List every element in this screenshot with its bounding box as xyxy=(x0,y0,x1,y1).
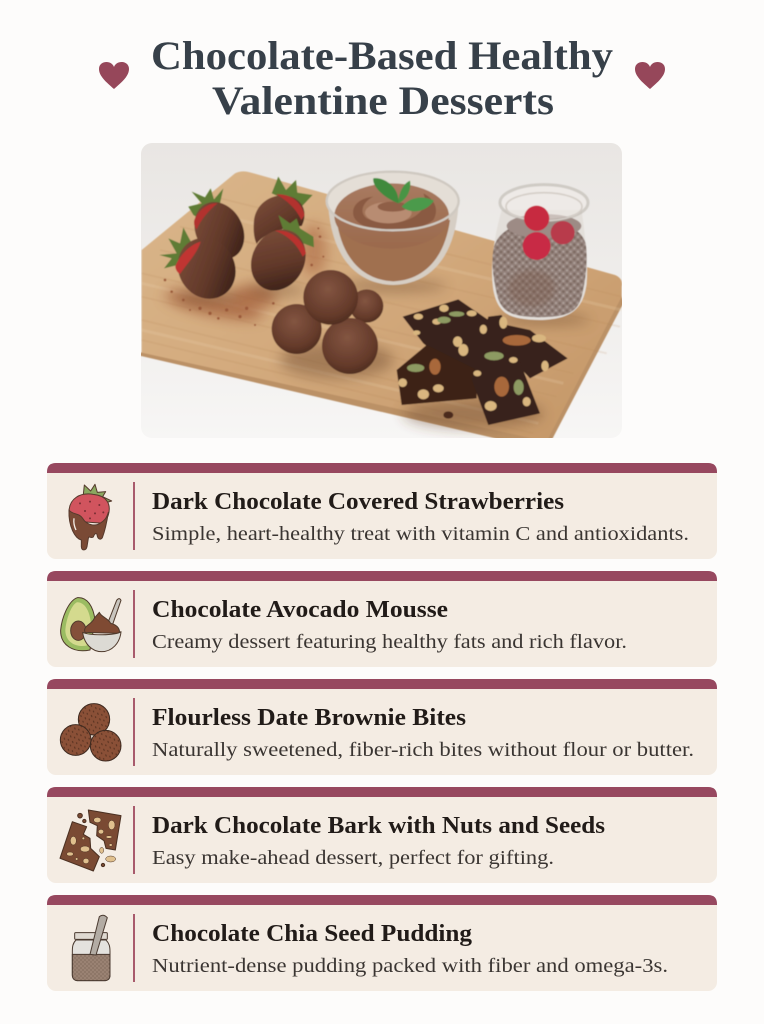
brownie bites xyxy=(272,270,383,374)
divider xyxy=(133,482,135,550)
divider xyxy=(133,698,135,766)
strawberry back right xyxy=(254,177,313,244)
icon: chia jar with spoon xyxy=(72,915,110,981)
strawberry front right xyxy=(250,215,314,291)
title: Chocolate-Based Healthy xyxy=(151,33,613,78)
description: Naturally sweetened, fiber-rich bites without flour or butter. xyxy=(152,739,694,761)
title: Valentine Desserts xyxy=(212,78,554,123)
card 4: chocolate bark xyxy=(47,787,717,883)
mousse bowl xyxy=(327,171,459,285)
card background xyxy=(47,679,717,775)
soft shadows xyxy=(178,280,590,428)
top bar xyxy=(47,463,717,473)
icon: right heart xyxy=(635,62,665,89)
chia pudding jar xyxy=(492,185,588,320)
icon: bark pieces xyxy=(60,810,121,871)
mint xyxy=(373,178,398,203)
card 3: brownie bites xyxy=(47,679,717,775)
heading: Dark Chocolate Bark with Nuts and Seeds xyxy=(152,813,605,839)
top bar xyxy=(47,679,717,689)
strawberry front left xyxy=(160,228,236,300)
card 5: chia pudding xyxy=(47,895,717,991)
description: Creamy dessert featuring healthy fats and rich flavor. xyxy=(152,631,627,653)
card background xyxy=(47,787,717,883)
card background xyxy=(47,571,717,667)
cocoa dust xyxy=(162,223,327,326)
top bar xyxy=(47,895,717,905)
card background xyxy=(47,895,717,991)
board xyxy=(138,171,623,443)
top bar xyxy=(47,787,717,797)
heading: Chocolate Chia Seed Pudding xyxy=(152,921,472,947)
card 2: avocado mousse xyxy=(47,571,717,667)
description: Simple, heart-healthy treat with vitamin C and antioxidants. xyxy=(152,523,689,545)
icon: avocado and mousse bowl xyxy=(61,598,121,652)
icon: left heart xyxy=(99,62,129,89)
description: Easy make-ahead dessert, perfect for gifting. xyxy=(152,847,554,869)
chocolate bark pieces xyxy=(397,299,568,425)
title xyxy=(151,33,613,123)
icon: three brownie bites xyxy=(60,704,121,761)
icon: chocolate strawberry xyxy=(69,484,112,550)
heading: Flourless Date Brownie Bites xyxy=(152,705,466,731)
card 1: strawberries xyxy=(47,463,717,559)
top bar xyxy=(47,571,717,581)
divider xyxy=(133,590,135,658)
strawberry back left xyxy=(188,188,245,258)
divider xyxy=(133,914,135,982)
photo: desserts on a wooden board xyxy=(138,143,623,443)
divider xyxy=(133,806,135,874)
description: Nutrient-dense pudding packed with fiber and omega-3s. xyxy=(152,955,668,977)
heading: Chocolate Avocado Mousse xyxy=(152,597,448,623)
heading: Dark Chocolate Covered Strawberries xyxy=(152,489,564,515)
card background xyxy=(47,463,717,559)
